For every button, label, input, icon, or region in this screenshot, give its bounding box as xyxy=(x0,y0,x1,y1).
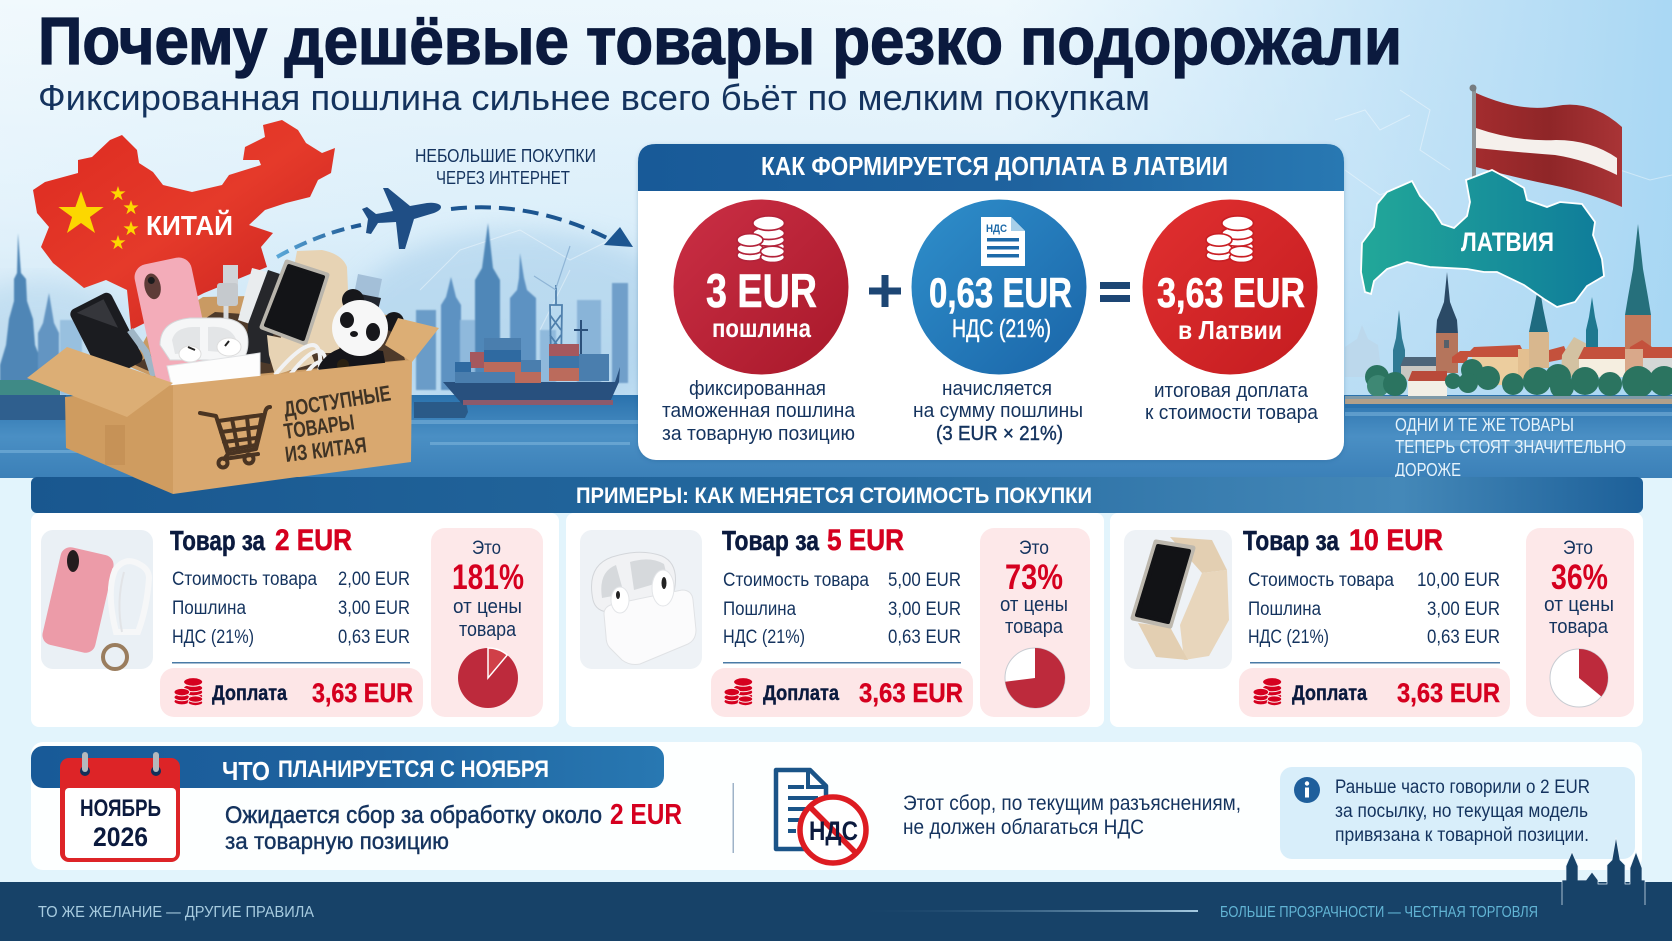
china flag stars xyxy=(58,186,139,249)
circle: duty xyxy=(674,200,848,374)
price table xyxy=(1248,570,1500,664)
circle: total: 3,63 EUR xyxy=(1157,269,1305,316)
share panel: от цены xyxy=(1000,594,1068,616)
calendar icon: 2026 xyxy=(93,822,148,852)
examples banner xyxy=(31,477,1643,513)
route arrow with plane xyxy=(277,188,633,257)
card 1 background xyxy=(31,513,559,727)
price table: НДС (21%) xyxy=(1248,627,1329,648)
goods: lightning plug xyxy=(352,274,382,310)
latvia caption: ОДНИ И ТЕ ЖЕ ТОВАРЫ xyxy=(1395,414,1574,435)
price table: Стоимость товара xyxy=(723,570,869,591)
plus sign xyxy=(869,275,901,307)
panel: how the surcharge forms xyxy=(638,144,1344,460)
route caption: ЧЕРЕЗ ИНТЕРНЕТ xyxy=(436,167,570,188)
surcharge row: 3,63 EUR xyxy=(312,678,413,708)
price table: НДС (21%) xyxy=(723,627,805,648)
surcharge row xyxy=(160,668,423,717)
far-left shore and boats xyxy=(0,380,468,420)
icon: shopping cart xyxy=(200,407,270,468)
goods: toy panda xyxy=(318,289,404,381)
price table: НДС (21%) xyxy=(172,627,254,648)
share panel xyxy=(431,528,543,717)
box faces xyxy=(65,385,173,494)
box bottom corner over banner xyxy=(133,477,297,494)
product image: watch xyxy=(1124,530,1232,669)
riga skyline xyxy=(1345,224,1672,408)
price table xyxy=(723,570,961,664)
icon: city silhouette xyxy=(1562,837,1645,905)
share panel: 36% xyxy=(1551,558,1608,597)
november text: Ожидается сбор за обработку около xyxy=(225,802,602,829)
heading: 10 EUR xyxy=(1349,524,1443,557)
goods: black phone xyxy=(68,291,145,381)
info callout: за посылку, но текущая модель xyxy=(1335,801,1588,822)
calendar icon: НОЯБРЬ xyxy=(80,795,161,822)
share panel: товара xyxy=(1549,616,1609,638)
tower B xyxy=(1436,272,1458,334)
caption: vat: (3 EUR × 21%) xyxy=(936,423,1063,445)
caption: vat: начисляется xyxy=(942,378,1052,400)
goods: device in white and black xyxy=(238,268,280,364)
price table: 2,00 EUR xyxy=(338,569,410,590)
product image: pink case xyxy=(40,530,153,669)
latvia caption: ДОРОЖЕ xyxy=(1395,459,1461,480)
water xyxy=(0,395,1672,478)
panel heading: КАК ФОРМИРУЕТСЯ ДОПЛАТА В ЛАТВИИ xyxy=(761,151,1228,181)
heading: 5 EUR xyxy=(827,524,904,557)
circle: vat: НДС (21%) xyxy=(952,315,1051,343)
price table xyxy=(172,569,410,664)
price table: 0,63 EUR xyxy=(888,627,961,648)
vat note: Этот сбор, по текущим разъяснениям, xyxy=(903,792,1241,815)
price table: Пошлина xyxy=(1248,599,1321,620)
goods: smart watch xyxy=(262,250,349,375)
share panel: от цены xyxy=(1544,594,1614,616)
china label: КИТАЙ xyxy=(146,209,233,241)
caption: vat: на сумму пошлины xyxy=(913,400,1083,422)
trees xyxy=(1365,359,1672,399)
route caption: НЕБОЛЬШИЕ ПОКУПКИ xyxy=(415,145,596,166)
tower D xyxy=(1586,297,1598,350)
price table: Стоимость товара xyxy=(172,569,317,590)
november text: 2 EUR xyxy=(610,799,682,831)
card: 2 EUR item xyxy=(40,524,543,717)
price table: Стоимость товара xyxy=(1248,570,1394,591)
price table: 3,00 EUR xyxy=(888,599,961,620)
share panel: Это xyxy=(472,538,501,559)
share panel: 181% xyxy=(452,558,524,597)
latvia caption: ТЕПЕРЬ СТОЯТ ЗНАЧИТЕЛЬНО xyxy=(1395,436,1626,457)
box label: ТОВАРЫ xyxy=(282,409,356,444)
share panel: 73% xyxy=(1005,558,1063,597)
latvian flag xyxy=(1470,84,1622,207)
panel: november plans xyxy=(31,742,1642,870)
cargo ship xyxy=(443,320,620,405)
left skyline xyxy=(0,233,82,400)
surcharge row xyxy=(1239,668,1510,717)
latvia label: ЛАТВИЯ xyxy=(1461,227,1554,257)
cardboard box with goods xyxy=(27,250,439,494)
card 3 background xyxy=(1110,513,1643,727)
price table: 5,00 EUR xyxy=(888,570,961,591)
no VAT icon xyxy=(776,770,866,863)
heading: Товар за xyxy=(1243,525,1339,556)
circle: vat xyxy=(912,200,1086,374)
surcharge row: 3,63 EUR xyxy=(859,678,963,708)
footer left text: ТО ЖЕ ЖЕЛАНИЕ — ДРУГИЕ ПРАВИЛА xyxy=(38,904,314,921)
price table: 10,00 EUR xyxy=(1417,570,1500,591)
price table: 0,63 EUR xyxy=(1427,627,1500,648)
heading: Товар за xyxy=(170,525,265,556)
church xyxy=(1400,357,1438,367)
icon: vat document: НДС xyxy=(986,223,1007,235)
footer right text: БОЛЬШЕ ПРОЗРАЧНОСТИ — ЧЕСТНАЯ ТОРГОВЛЯ xyxy=(1220,904,1538,921)
circle: duty: 3 EUR xyxy=(706,264,817,317)
crane xyxy=(534,246,570,367)
share panel: товара xyxy=(1005,616,1064,638)
icon: vat document xyxy=(981,217,1025,266)
surcharge row: Доплата xyxy=(763,682,839,705)
caption: total: итоговая доплата xyxy=(1154,380,1309,402)
share panel: от цены xyxy=(453,596,522,618)
november text: за товарную позицию xyxy=(225,828,449,854)
surcharge row: 3,63 EUR xyxy=(1397,678,1500,708)
share panel: Это xyxy=(1019,538,1049,559)
goods: pink phone xyxy=(132,255,215,388)
product image: earbuds xyxy=(580,530,702,669)
icon: coins xyxy=(1206,216,1254,263)
surcharge row: Доплата xyxy=(1292,682,1367,705)
building 1 xyxy=(1452,345,1526,363)
pie chart xyxy=(1005,648,1065,708)
pie chart xyxy=(1550,649,1608,707)
latvia caption xyxy=(1395,414,1626,480)
price table: Пошлина xyxy=(172,598,246,619)
goods: cables xyxy=(275,345,326,376)
calendar icon xyxy=(60,752,180,862)
china map xyxy=(33,120,335,330)
info callout xyxy=(1280,767,1635,859)
tower C xyxy=(1529,283,1548,332)
vat note: не должен облагаться НДС xyxy=(903,816,1144,839)
card: 5 EUR item xyxy=(580,524,1090,717)
card 2 background xyxy=(566,513,1104,727)
november heading: ЧТО xyxy=(222,756,270,786)
red house xyxy=(1408,371,1447,381)
pie chart xyxy=(458,648,518,708)
route caption xyxy=(415,145,596,188)
november heading xyxy=(31,746,664,788)
goods: earbuds case xyxy=(160,318,260,387)
heading: Товар за xyxy=(722,525,819,556)
circle: duty: пошлина xyxy=(712,313,811,343)
circle: total xyxy=(1142,200,1318,374)
footer xyxy=(0,837,1672,941)
circle: vat: 0,63 EUR xyxy=(929,269,1072,316)
november heading: ПЛАНИРУЕТСЯ С НОЯБРЯ xyxy=(278,756,549,783)
building 3 xyxy=(1578,347,1630,359)
icon: info xyxy=(1294,777,1320,803)
haze and map outlines xyxy=(0,90,1672,410)
subtitle: Фиксированная пошлина сильнее всего бьёт по мелким покупкам xyxy=(38,77,1150,118)
city skyline xyxy=(416,223,628,390)
examples section xyxy=(31,477,1643,727)
icon: plane xyxy=(362,188,441,249)
price table: 3,00 EUR xyxy=(338,598,410,619)
caption: total: к стоимости товара xyxy=(1145,402,1319,424)
caption: duty: за товарную позицию xyxy=(662,423,855,445)
vat note xyxy=(903,792,1241,839)
equals sign xyxy=(1100,282,1130,302)
share panel: товара xyxy=(459,619,517,641)
caption: vat xyxy=(913,378,1083,445)
tower A xyxy=(1393,310,1405,374)
box label xyxy=(282,380,392,467)
circle: total: в Латвии xyxy=(1178,315,1282,345)
share panel xyxy=(980,528,1090,717)
price table: 3,00 EUR xyxy=(1427,599,1500,620)
share panel: Это xyxy=(1563,538,1593,559)
price table: 0,63 EUR xyxy=(338,627,410,648)
building 2 small xyxy=(1549,346,1569,362)
box label: ДОСТУПНЫЕ xyxy=(282,380,392,422)
heading xyxy=(170,524,352,557)
heading xyxy=(1243,524,1443,557)
caption: duty: фиксированная xyxy=(689,378,826,400)
examples banner: ПРИМЕРЫ: КАК МЕНЯЕТСЯ СТОИМОСТЬ ПОКУПКИ xyxy=(576,483,1092,508)
goods: usb cable xyxy=(217,265,238,330)
surcharge row: Доплата xyxy=(212,682,287,705)
tower E xyxy=(1625,224,1651,315)
share panel xyxy=(1526,528,1634,717)
caption: duty: таможенная пошлина xyxy=(662,400,856,422)
box label: ИЗ КИТАЯ xyxy=(284,432,368,467)
caption: total xyxy=(1145,380,1319,424)
info callout: Раньше часто говорили о 2 EUR xyxy=(1335,777,1590,798)
card: 10 EUR item xyxy=(1124,524,1634,717)
caption: duty xyxy=(662,378,856,445)
heading: 2 EUR xyxy=(275,524,352,557)
latvia map xyxy=(1361,170,1604,307)
info callout: привязана к товарной позиции. xyxy=(1335,825,1589,846)
price table: Пошлина xyxy=(723,599,796,620)
november text xyxy=(225,799,682,854)
surcharge row xyxy=(711,668,973,717)
icon: coins xyxy=(737,216,785,263)
goods: phone cable xyxy=(130,330,154,376)
heading xyxy=(722,524,904,557)
no VAT icon: НДС xyxy=(809,816,858,846)
title: Почему дешёвые товары резко подорожали xyxy=(38,4,1402,79)
